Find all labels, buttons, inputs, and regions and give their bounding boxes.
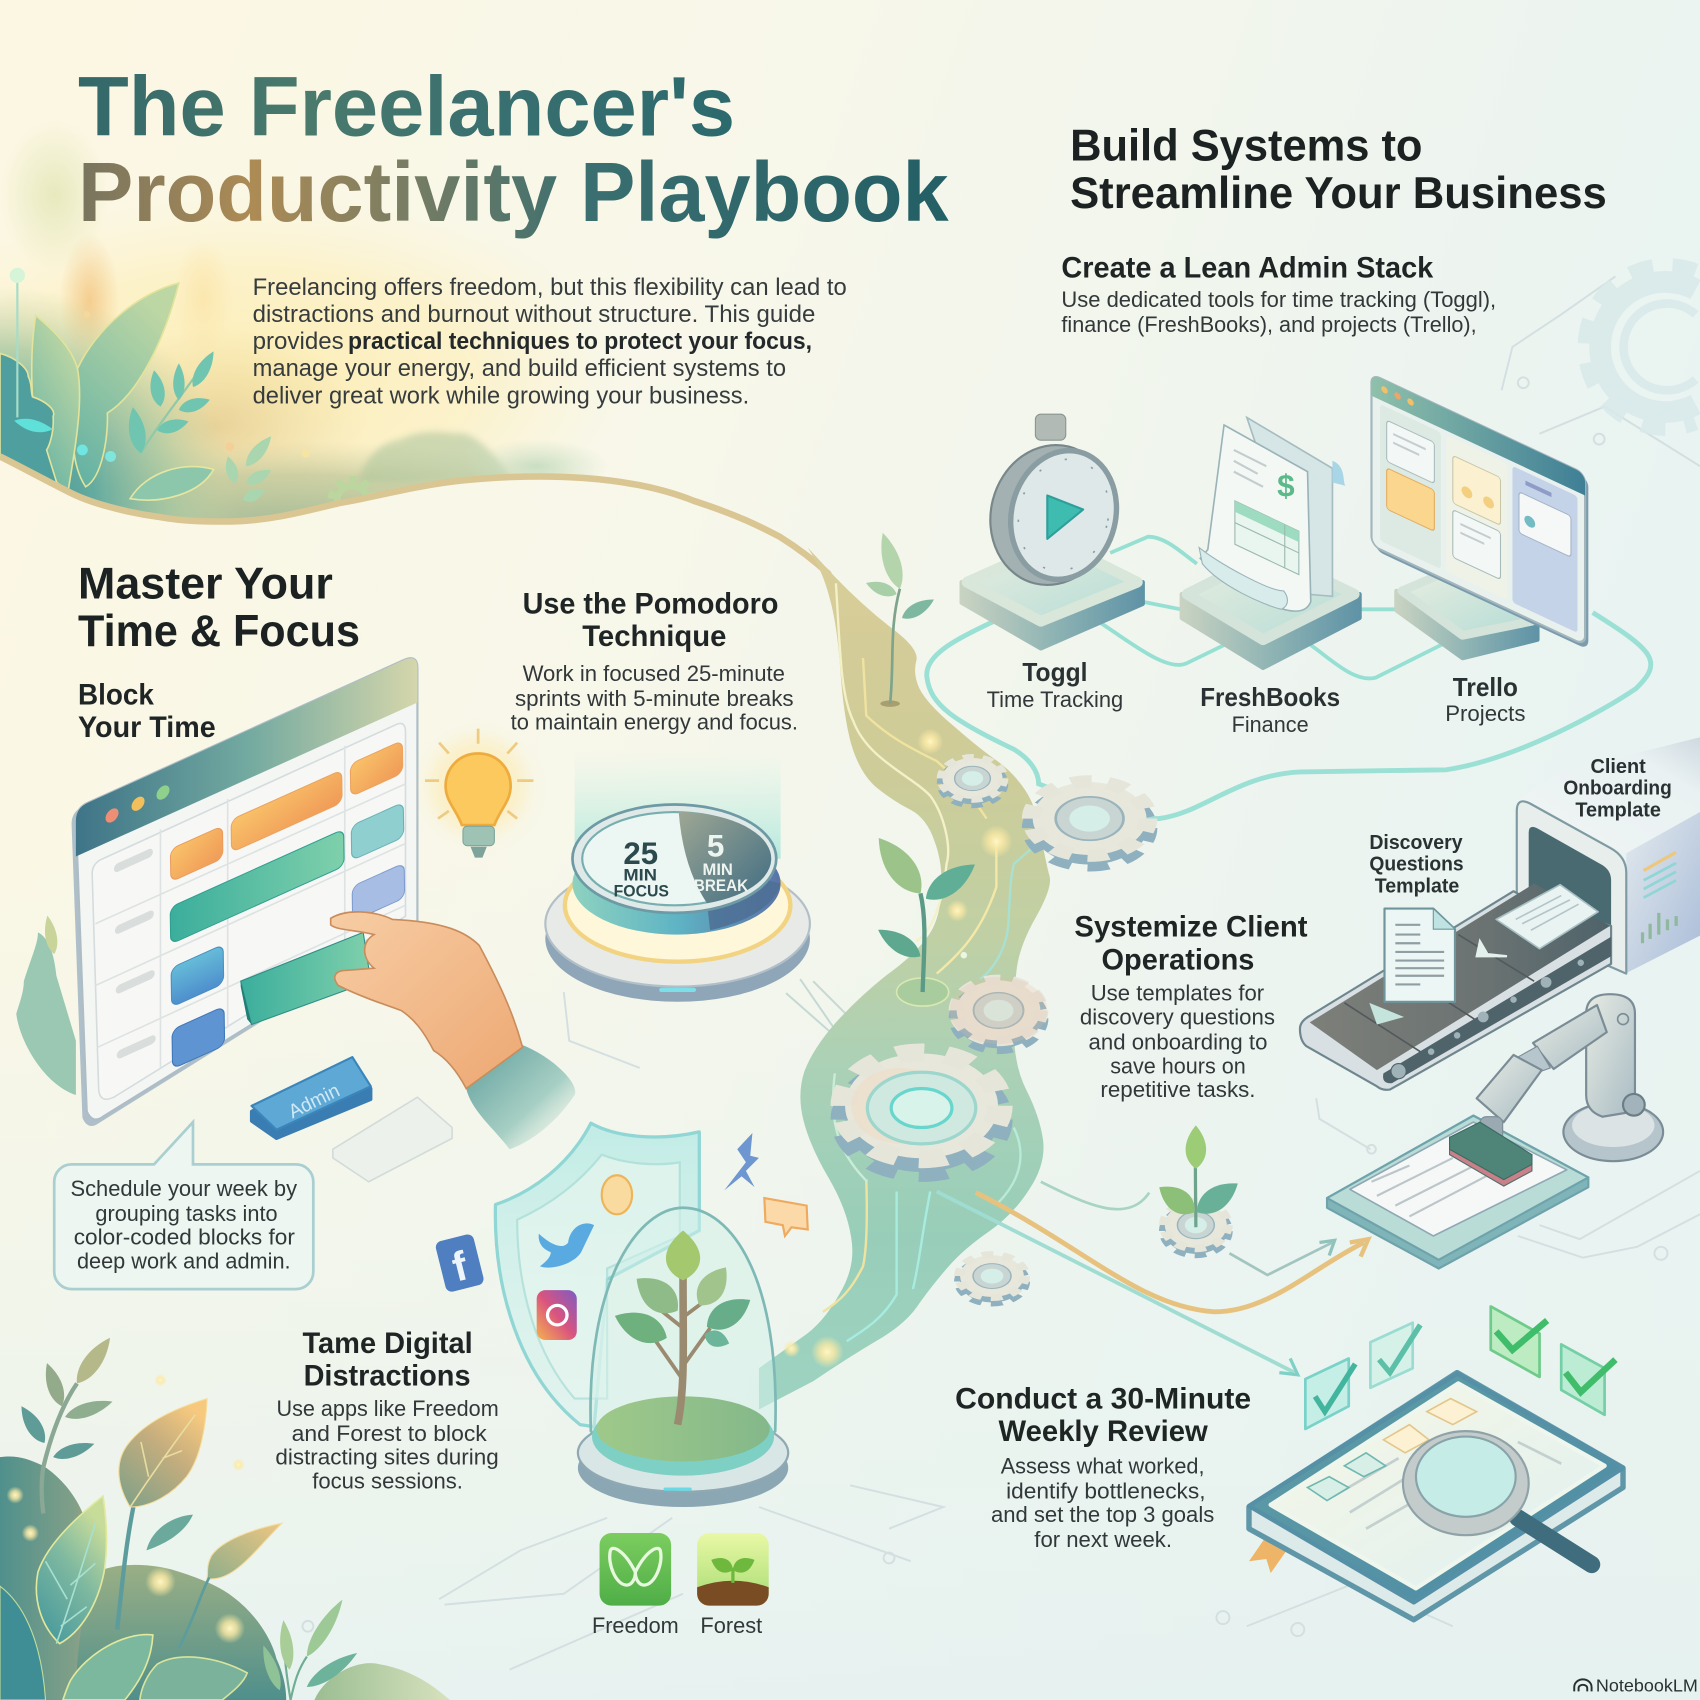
lean stack: trello station: Projects xyxy=(1445,701,1525,726)
text block: weekly review: and set the top 3 goals xyxy=(991,1502,1214,1527)
dial labels: MIN xyxy=(623,866,657,884)
label: Toggl xyxy=(1022,657,1087,687)
lean stack: toggl station xyxy=(962,414,1452,712)
conveyor belt xyxy=(1300,884,1611,1090)
gears xyxy=(843,757,1148,1303)
icon: forest app: Forest xyxy=(700,1613,763,1638)
shield xyxy=(495,1123,699,1427)
gear lower xyxy=(959,1255,1025,1303)
text block: tame digital distractions: Tame Digital xyxy=(302,1328,473,1360)
gold leaf xyxy=(179,1523,282,1648)
bottom-left foliage xyxy=(0,1333,450,1700)
empty block xyxy=(333,1097,452,1182)
big leaf right xyxy=(73,283,179,487)
title xyxy=(78,59,950,239)
branch xyxy=(15,1333,117,1514)
leaf bottom xyxy=(130,467,214,500)
pomodoro dial xyxy=(545,750,810,1002)
robot arm xyxy=(1477,994,1663,1161)
text block: lean admin stack: Use dedicated tools for time tracking (Toggl), xyxy=(1061,287,1496,312)
faint background gear xyxy=(1585,266,1696,428)
stamp xyxy=(1450,1122,1532,1186)
dial labels: BREAK xyxy=(694,877,748,895)
central winding path xyxy=(759,548,1050,1409)
heading: master your time: Time & Focus xyxy=(78,607,360,656)
text block: pomodoro xyxy=(511,589,798,735)
gear center right xyxy=(950,977,1047,1049)
callout bubble: grouping tasks into xyxy=(95,1201,278,1226)
icon: blue flag xyxy=(724,1133,759,1190)
icon: smile xyxy=(602,1175,632,1214)
text block: weekly review: Assess what worked, xyxy=(1001,1453,1205,1478)
teal arrow to review xyxy=(937,1192,1298,1375)
heading: build systems: Build Systems to xyxy=(1070,121,1422,170)
icon: kanban monitor xyxy=(1371,374,1588,650)
sprig xyxy=(258,1596,361,1700)
lean stack: freshbooks station: Finance xyxy=(1232,712,1309,737)
text block: systemize client operations: Operations xyxy=(1102,944,1254,976)
text block: lean admin stack: finance (FreshBooks), and projects (Trello), xyxy=(1061,312,1477,337)
machine front frame xyxy=(1517,801,1626,974)
lean stack: trello station xyxy=(1371,374,1588,726)
top-left forest scene xyxy=(0,136,592,518)
conveyor machine xyxy=(1300,737,1700,1090)
big teal leaf xyxy=(36,1496,107,1644)
text block: lean admin stack: Create a Lean Admin Stack xyxy=(1061,253,1434,285)
base xyxy=(1182,553,1360,668)
bookmark xyxy=(1249,1533,1291,1573)
callout bubble: Schedule your week by xyxy=(70,1176,298,1201)
text block: weekly review xyxy=(955,1383,1251,1552)
weekly review tablet xyxy=(1249,1306,1623,1620)
hand xyxy=(331,912,523,1089)
icon: invoice: $ xyxy=(1277,469,1295,504)
mound middle xyxy=(76,1565,286,1700)
text block: pomodoro: Use the Pomodoro xyxy=(523,589,778,621)
heading: master your time: Master Your xyxy=(78,559,333,608)
text block: systemize client operations: and onboarding to xyxy=(1089,1029,1267,1054)
mound left xyxy=(0,1456,119,1700)
glow dots xyxy=(7,1374,245,1644)
plant on gear xyxy=(1153,1125,1244,1254)
shield and social icons xyxy=(434,1123,808,1427)
hand and sleeve xyxy=(331,912,575,1149)
conveyor machine: Template xyxy=(1375,875,1459,897)
icon: forest app xyxy=(697,1533,769,1638)
orange leaf xyxy=(117,1399,207,1630)
circuit line decoration xyxy=(302,276,1700,1670)
label: FreshBooks xyxy=(1200,682,1340,712)
far mound xyxy=(314,1663,450,1700)
icon: stopwatch xyxy=(976,414,1130,598)
heading: master your time xyxy=(78,559,360,656)
text block: pomodoro: Work in focused 25-minute xyxy=(523,661,785,686)
plant behind calendar xyxy=(16,915,76,1095)
text block: weekly review: for next week. xyxy=(1034,1527,1172,1552)
intro paragraph: provides xyxy=(253,328,344,355)
heading: build systems: Streamline Your Business xyxy=(1070,169,1607,218)
leaf bottom centre xyxy=(63,1635,153,1700)
dial labels: FOCUS xyxy=(614,883,669,901)
tree xyxy=(610,1231,757,1425)
sprig pale xyxy=(226,436,272,502)
connector lines xyxy=(1096,537,1452,678)
checkbox icons xyxy=(1305,1306,1615,1429)
base xyxy=(1396,569,1537,658)
icon: light bulb xyxy=(425,729,533,858)
stamped document with robot arm xyxy=(1327,994,1663,1268)
text block: pomodoro: Technique xyxy=(582,621,726,653)
text block: tame digital distractions: Use apps like Freedom xyxy=(276,1396,499,1421)
callout bubble: color-coded blocks for xyxy=(74,1225,295,1250)
plants along path xyxy=(864,530,981,1006)
intro paragraph: manage your energy, and build efficient systems to xyxy=(253,355,786,382)
text block: weekly review: identify bottlenecks, xyxy=(1006,1478,1206,1503)
text block: systemize client operations: Use templates for xyxy=(1091,981,1265,1006)
path lines xyxy=(823,583,1040,1341)
text block: pomodoro: sprints with 5-minute breaks xyxy=(515,686,794,711)
gear large center xyxy=(843,1052,1000,1173)
paper on belt xyxy=(1496,885,1598,949)
top sprout xyxy=(864,530,937,707)
intro paragraph: Freelancing offers freedom, but this flexibility can lead to xyxy=(253,274,847,301)
text block: systemize client operations: Systemize Client xyxy=(1074,912,1308,944)
title line 2: Productivity Playbook xyxy=(78,144,950,239)
glass dome with tree xyxy=(578,1208,788,1507)
conveyor machine: Discovery xyxy=(1369,832,1463,854)
conveyor machine: Questions xyxy=(1369,854,1464,876)
teal curve to plant xyxy=(1041,1182,1149,1209)
tablet xyxy=(1249,1373,1623,1620)
gold arrow xyxy=(976,1193,1368,1312)
plate xyxy=(1327,1116,1588,1268)
title line 1: The Freelancer's xyxy=(78,59,735,154)
heading: block your time: Block xyxy=(78,680,155,712)
intro paragraph xyxy=(253,274,847,409)
teal network line xyxy=(927,613,1651,819)
icon: twitter bird xyxy=(539,1223,594,1268)
base xyxy=(962,542,1143,648)
text block: weekly review: Weekly Review xyxy=(999,1416,1208,1448)
intro paragraph: deliver great work while growing your business. xyxy=(253,382,749,409)
text block: lean admin stack xyxy=(1061,253,1496,337)
text block: weekly review: Conduct a 30-Minute xyxy=(955,1383,1251,1415)
machine top face xyxy=(1517,737,1700,853)
connector arrows xyxy=(937,1182,1368,1375)
admin button xyxy=(252,1057,371,1138)
text block: systemize client operations xyxy=(1074,912,1308,1102)
icon: facebook xyxy=(434,1233,485,1293)
text block: systemize client operations: save hours on xyxy=(1110,1053,1246,1078)
notebooklm logo: NotebookLM xyxy=(1596,1675,1698,1695)
text block: tame digital distractions: Distractions xyxy=(304,1361,471,1393)
dial labels: 5 xyxy=(707,829,724,864)
text block: tame digital distractions xyxy=(275,1328,499,1494)
machine labels xyxy=(1563,756,1672,821)
machine labels: Template xyxy=(1575,799,1661,821)
heading: block your time: Your Time xyxy=(78,712,216,744)
grey teal arrow xyxy=(1229,1240,1335,1275)
dragged green block xyxy=(241,932,371,1025)
heading: block your time xyxy=(78,680,216,744)
dial labels: 25 xyxy=(623,836,658,871)
icon: chat bubble xyxy=(764,1198,808,1236)
lean stack: toggl station: Time Tracking xyxy=(987,687,1123,712)
text block: tame digital distractions: focus sessions. xyxy=(312,1469,463,1494)
machine labels: Client xyxy=(1590,756,1646,778)
teal side leaf xyxy=(146,1515,193,1550)
left bush xyxy=(0,352,58,482)
path glow dots xyxy=(783,729,1013,1368)
admin button: Admin xyxy=(285,1080,343,1123)
gold divider curve xyxy=(0,456,829,575)
callout bubble: deep work and admin. xyxy=(77,1248,291,1273)
icon: freedom app xyxy=(592,1533,679,1638)
center sprout xyxy=(868,830,981,1006)
icon: invoice xyxy=(1199,417,1345,611)
icon: document xyxy=(1385,909,1455,1002)
icon: instagram xyxy=(537,1290,577,1340)
leaf lower left xyxy=(0,1586,46,1700)
icon: facebook: f xyxy=(448,1242,472,1290)
calendar panel xyxy=(16,658,417,1126)
intro paragraph: distractions and burnout without structure. This guide xyxy=(253,301,815,328)
machine right face xyxy=(1625,812,1700,974)
gear medium upper xyxy=(1031,781,1148,865)
text block: systemize client operations: repetitive tasks. xyxy=(1100,1077,1255,1102)
dial labels: MIN xyxy=(703,861,733,879)
icon: freedom app: Freedom xyxy=(592,1613,679,1638)
intro paragraph: practical techniques to protect your focus, xyxy=(348,328,812,355)
bushes xyxy=(358,432,515,482)
leaf bottom right xyxy=(140,1657,247,1700)
text block: pomodoro: to maintain energy and focus. xyxy=(511,710,798,735)
magnifier xyxy=(1403,1431,1592,1564)
heading: build systems xyxy=(1070,121,1607,218)
big leaf left xyxy=(32,315,80,490)
lean stack: freshbooks station xyxy=(1182,417,1360,737)
text block: systemize client operations: discovery questions xyxy=(1080,1005,1275,1030)
callout bubble xyxy=(54,1122,313,1289)
dial labels xyxy=(614,829,748,901)
text block: tame digital distractions: distracting sites during xyxy=(275,1445,499,1470)
sprig teal xyxy=(128,352,214,454)
machine labels: Onboarding xyxy=(1563,778,1672,800)
label: Trello xyxy=(1453,672,1518,702)
text block: tame digital distractions: and Forest to block xyxy=(292,1421,488,1446)
gear small upper xyxy=(942,757,1003,805)
sleeve xyxy=(466,1045,575,1149)
